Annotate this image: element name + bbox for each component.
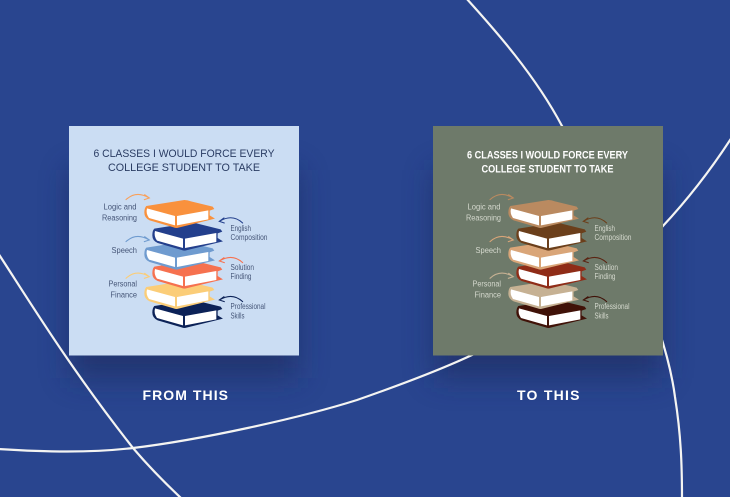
labels: English	[230, 224, 251, 233]
title: from this	[94, 148, 275, 174]
labels: Solution	[594, 263, 618, 272]
labels: Logic and	[104, 202, 136, 212]
title: from this: 6 CLASSES I WOULD FORCE EVERY	[94, 148, 275, 160]
labels	[102, 202, 268, 320]
title: from this: COLLEGE STUDENT TO TAKE	[108, 162, 260, 174]
labels: Professional	[230, 302, 266, 311]
labels: Finding	[594, 272, 616, 281]
labels: Skills	[230, 312, 244, 320]
title: to this: 6 CLASSES I WOULD FORCE EVERY	[467, 150, 628, 162]
labels: Speech	[476, 246, 501, 255]
labels: Finance	[110, 290, 138, 300]
panel: to this	[433, 126, 663, 356]
labels: Reasoning	[466, 214, 501, 222]
panel: from this	[69, 126, 299, 356]
labels: Finance	[474, 290, 502, 300]
book stack	[508, 200, 587, 328]
labels: Personal	[472, 280, 501, 288]
book stack	[144, 200, 223, 328]
labels: Composition	[594, 233, 632, 242]
labels: English	[594, 224, 615, 233]
title: to this: COLLEGE STUDENT TO TAKE	[482, 164, 614, 176]
caption: to this: TO THIS	[517, 387, 580, 403]
labels: Skills	[594, 312, 608, 320]
labels: Reasoning	[102, 214, 137, 222]
labels: Personal	[108, 280, 137, 288]
labels: Logic and	[468, 202, 500, 212]
caption: from this: FROM THIS	[142, 387, 228, 403]
labels: Finding	[230, 272, 252, 281]
labels: Composition	[230, 233, 268, 242]
arrows	[126, 194, 243, 302]
card shadows	[70, 170, 662, 378]
title: to this	[467, 150, 628, 176]
labels: Speech	[112, 246, 137, 255]
arrows	[490, 194, 607, 302]
labels: Solution	[230, 263, 254, 272]
labels: Professional	[594, 302, 630, 311]
labels	[466, 202, 632, 320]
